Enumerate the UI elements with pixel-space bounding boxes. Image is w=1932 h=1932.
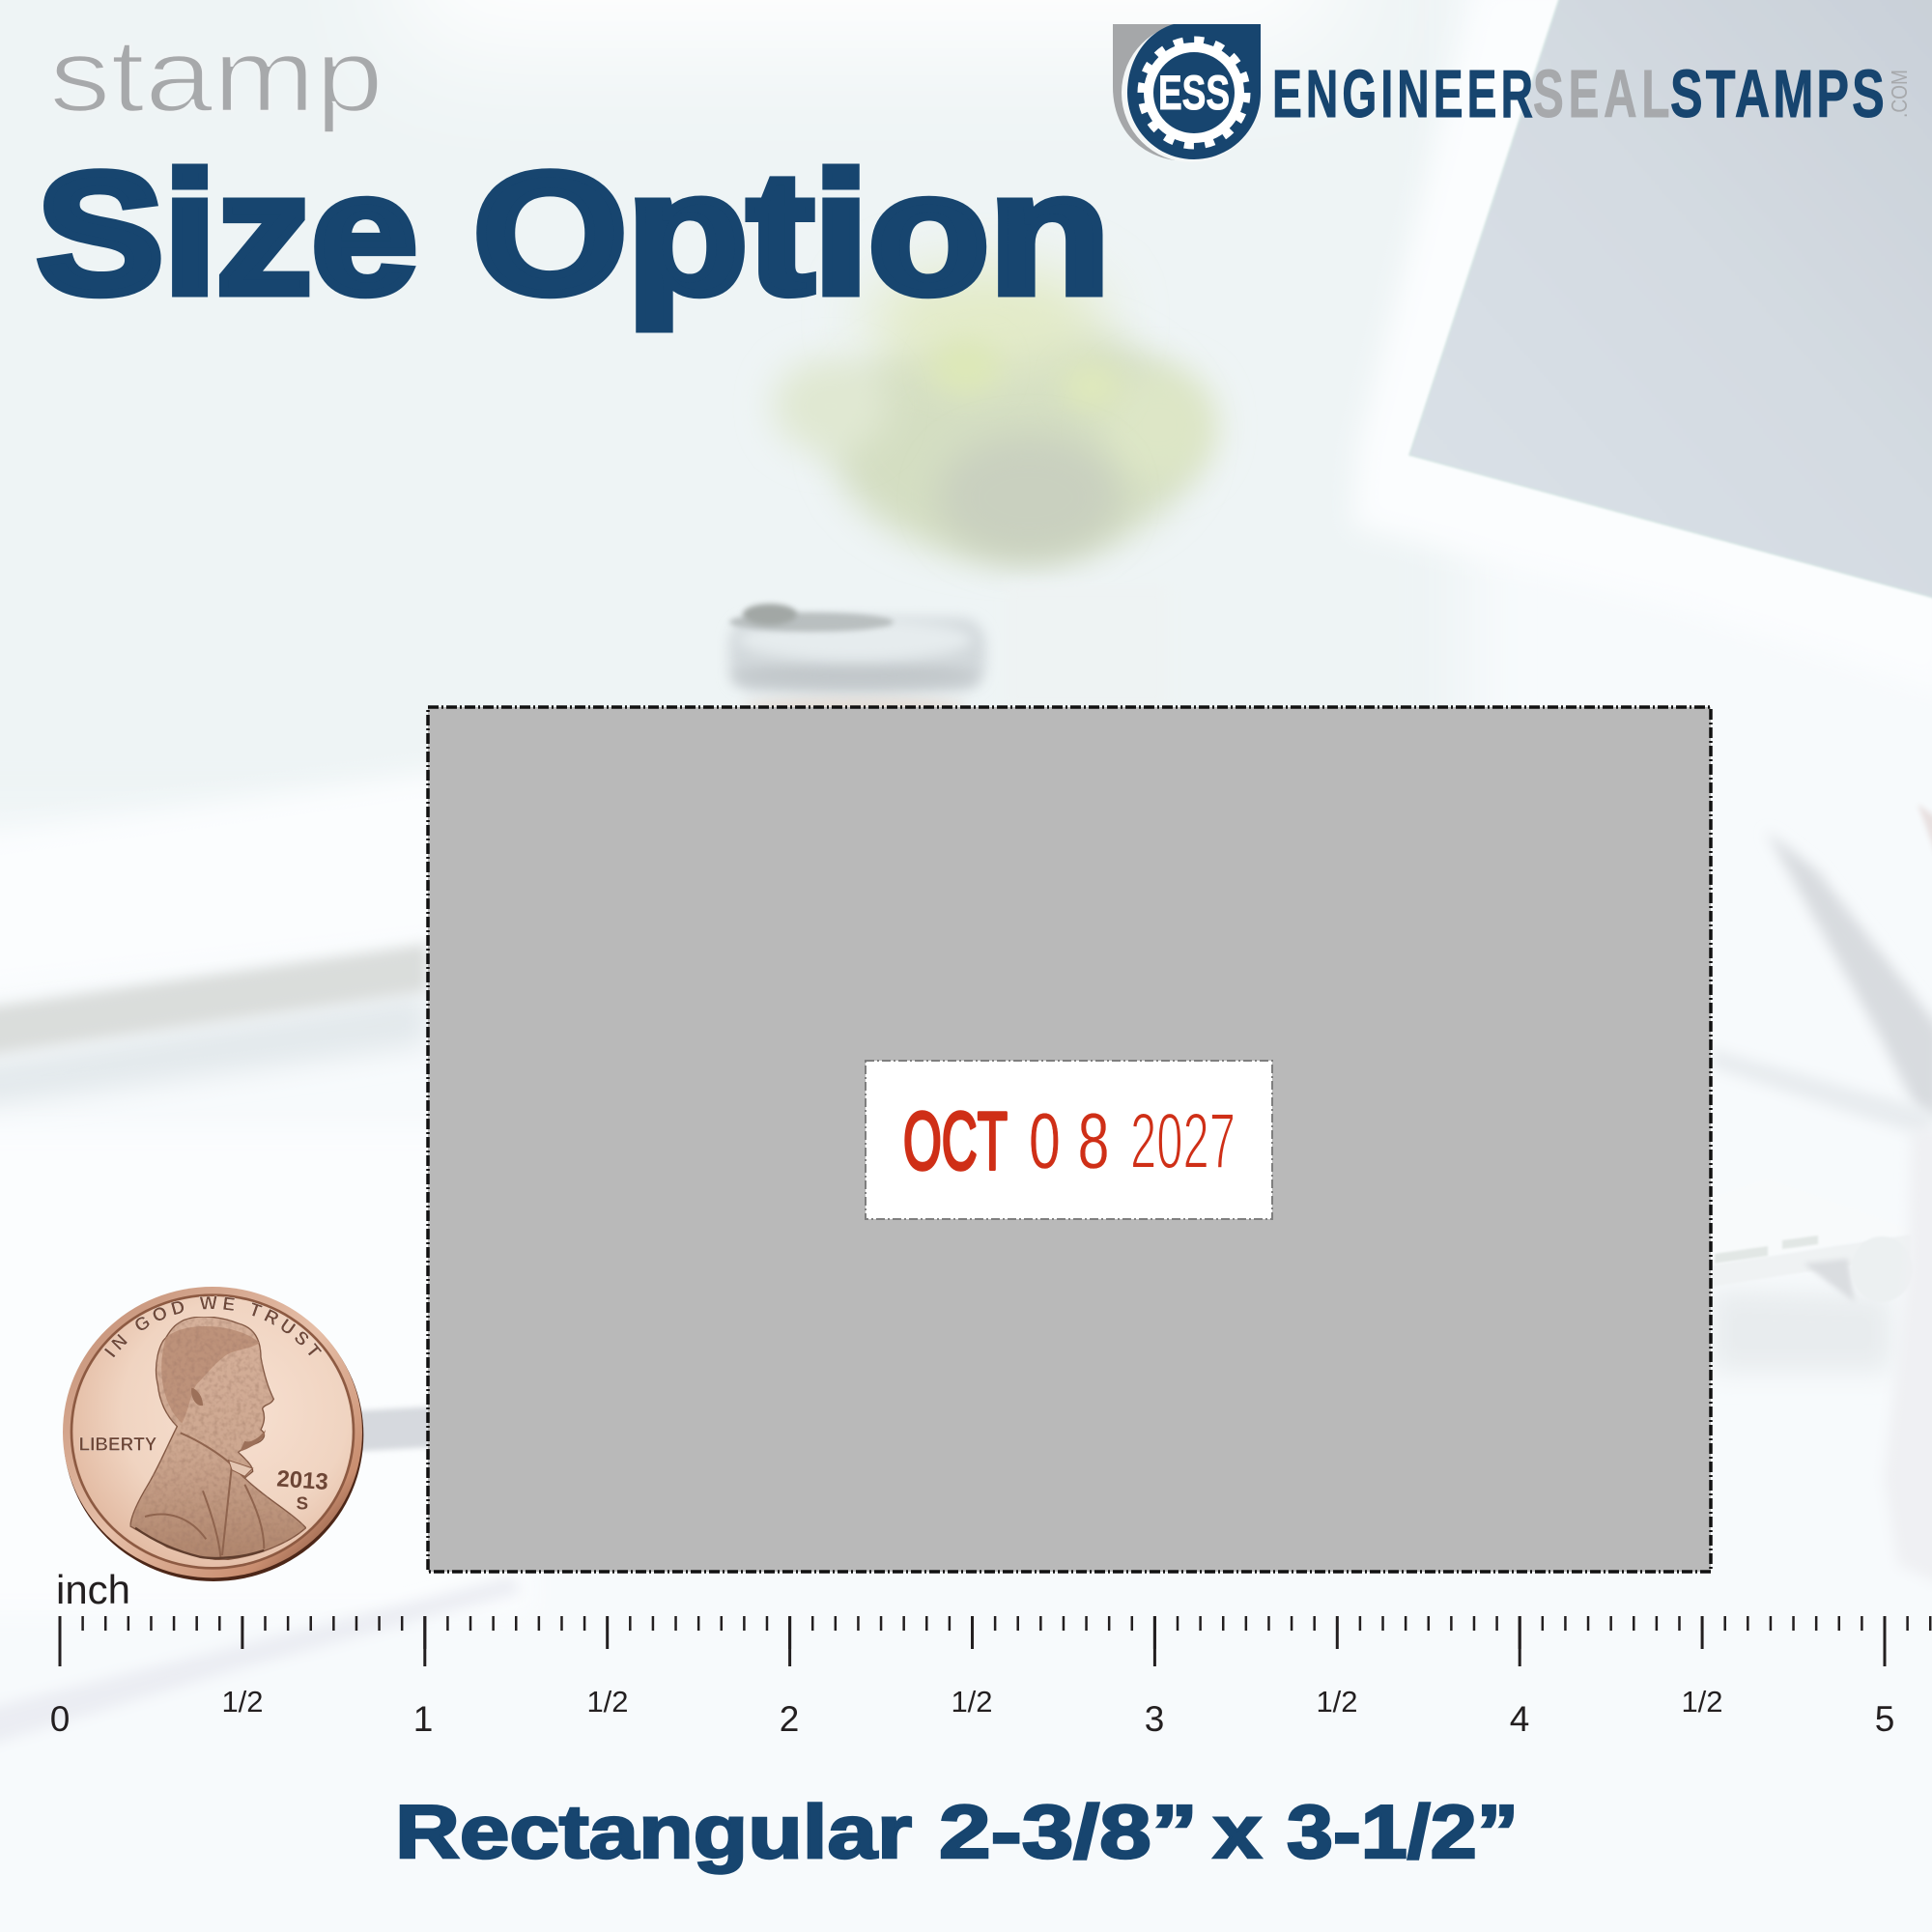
title: Size Option: Option (473, 137, 1110, 329)
date text: OCT 08 2027: 08 (1029, 1097, 1110, 1185)
ruler half-inch labels: 1/2 (1681, 1685, 1723, 1719)
wordmark: .COM: .COM (1887, 70, 1912, 118)
ruler inch numbers: 5 (1875, 1699, 1894, 1739)
coin mint mark: S (297, 1492, 308, 1513)
ruler inch numbers: 3 (1145, 1699, 1164, 1739)
ruler inch numbers: 2 (780, 1699, 799, 1739)
desk shelf at left (0, 763, 541, 995)
ruler half-inch labels: 1/2 (221, 1685, 264, 1719)
caption: stamp dimensions: Rectangular (395, 1789, 912, 1874)
icon: one cent coin (63, 1287, 363, 1581)
penny backdrop shade (328, 1406, 435, 1453)
date text: OCT 08 2027 (903, 1095, 1236, 1186)
icon: ESS gear shield (1113, 23, 1261, 162)
panel: white impression area (866, 1061, 1272, 1219)
title: Size Option (37, 137, 1110, 329)
date text: OCT 08 2027: 2027 (1130, 1097, 1236, 1185)
ruler (50, 1567, 1932, 1739)
ruler half-inch labels: 1/2 (951, 1685, 993, 1719)
caption: stamp dimensions: 2-3/8” (939, 1789, 1198, 1874)
coin word: LIBERTY: LIBERTY (79, 1435, 156, 1456)
ruler half-inch labels: 1/2 (586, 1685, 629, 1719)
word: stamp: stamp (49, 16, 384, 133)
wordmark: STAMPS: STAMPS (1670, 56, 1885, 131)
monitor screen (1409, 0, 1932, 600)
ruler half-inch labels (221, 1685, 1723, 1719)
coffee cup (744, 696, 966, 719)
icon: ESS gear shield: ESS (1158, 66, 1230, 120)
logo: Engineer Seal Stamps (1113, 23, 1912, 162)
coin motto: IN GOD WE TRUST (104, 1296, 323, 1358)
caption: stamp dimensions (395, 1789, 1519, 1874)
wordmark: SEAL: SEAL (1533, 56, 1669, 131)
ruler ticks (58, 1623, 1932, 1641)
title: Size Option: Size (37, 137, 417, 329)
ruler inch numbers: 1 (413, 1699, 433, 1739)
date text: OCT 08 2027: OCT (903, 1095, 1008, 1186)
panel: gray stamp body (428, 707, 1711, 1572)
ruler inch numbers: 4 (1510, 1699, 1529, 1739)
ruler unit label: inch (56, 1567, 130, 1612)
ruler inch numbers (50, 1699, 1894, 1739)
pens at right (1766, 831, 1932, 1121)
monitor bezel (1352, 0, 1932, 696)
faint diagonal streak (0, 1577, 522, 1753)
ruler half-inch labels: 1/2 (1316, 1685, 1358, 1719)
caption: stamp dimensions: x (1213, 1789, 1262, 1874)
caption: stamp dimensions: 3-1/2” (1287, 1789, 1519, 1874)
coin bust (130, 1317, 306, 1560)
plant (831, 319, 1198, 560)
keyboard (1711, 1290, 1893, 1372)
knit cloth (1884, 1130, 1932, 1594)
ruler inch numbers: 0 (50, 1699, 70, 1739)
coin year: 2013 (276, 1465, 329, 1495)
wordmark: ENGINEER: ENGINEER (1272, 55, 1533, 131)
